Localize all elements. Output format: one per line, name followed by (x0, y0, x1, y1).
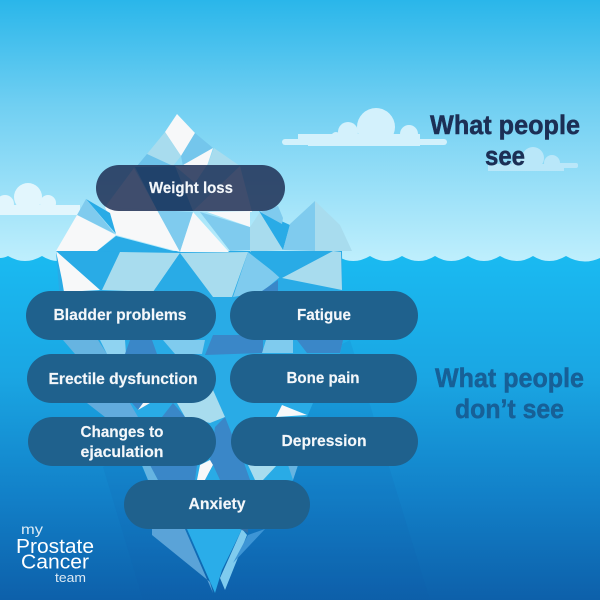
pill: depression (231, 417, 418, 466)
iceberg: above-water facets (56, 199, 352, 252)
logo: myProstateCancer team: my (21, 521, 43, 537)
sky background (0, 0, 600, 262)
pill: changes to ejaculation: ejaculation (80, 444, 164, 461)
heading: what people don't see: What people (435, 363, 584, 393)
pill: bladder problems: Bladder problems (54, 307, 186, 324)
pill: anxiety: Anxiety (188, 496, 246, 513)
iceberg: underwater facets (56, 251, 343, 593)
logo: myProstateCancer team (16, 521, 94, 585)
logo: myProstateCancer team: team (55, 570, 86, 585)
pill: changes to ejaculation (28, 417, 216, 466)
heading: what people don't see: don’t see (455, 394, 564, 424)
iceberg: tip facets (105, 114, 252, 212)
underwater iceberg shadow (103, 340, 430, 600)
iceberg: underwater base (56, 251, 343, 525)
iceberg (56, 114, 352, 593)
ocean water with scalloped surface (0, 256, 600, 600)
heading: what people don't see (435, 363, 584, 424)
logo: myProstateCancer team: Cancer (21, 552, 89, 574)
logo: myProstateCancer team: Prostate (16, 536, 94, 558)
pill: changes to ejaculation: Changes to (80, 424, 164, 441)
pill: fatigue: Fatigue (297, 307, 351, 324)
pill: weight loss (96, 165, 285, 211)
heading: what people see: What people (430, 110, 580, 140)
cloud: left (0, 183, 80, 215)
pill: erectile dysfunction (27, 354, 216, 403)
pill: depression: Depression (282, 433, 366, 450)
cloud: center (282, 108, 447, 146)
pill: bone pain (230, 354, 417, 403)
pill: bladder problems (26, 291, 216, 340)
pill: bone pain: Bone pain (286, 370, 360, 387)
heading: what people see (430, 110, 580, 171)
heading: what people see: see (485, 141, 525, 171)
pill: erectile dysfunction: Erectile dysfunction (48, 371, 198, 388)
cloud: right (488, 147, 578, 171)
pill: weight loss: Weight loss (149, 180, 233, 197)
pill: anxiety (124, 480, 310, 529)
pill: fatigue (230, 291, 418, 340)
